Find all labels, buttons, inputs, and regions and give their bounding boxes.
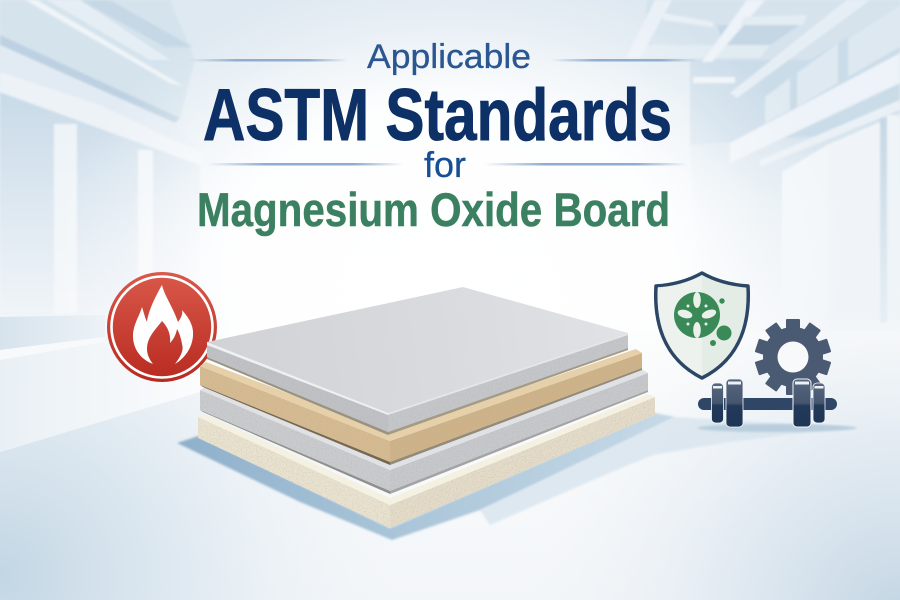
title block <box>189 38 698 236</box>
icon: fire resistance badge <box>107 272 217 382</box>
icon: dumbbell <box>697 379 857 432</box>
heading line: ASTM Standards: ASTM Standards <box>203 75 672 156</box>
board 3: grey <box>200 369 648 494</box>
floor <box>0 330 900 600</box>
heading line: Applicable: Applicable <box>367 38 531 76</box>
icon: gear <box>755 319 831 395</box>
board 2: tan <box>200 349 642 465</box>
stacked magnesium oxide boards <box>198 287 655 528</box>
icon: mold resistance shield <box>656 273 748 378</box>
flame <box>133 285 193 364</box>
board 1: top grey <box>207 287 628 435</box>
heading line: for: for <box>424 144 466 185</box>
heading line: Magnesium Oxide Board: Magnesium Oxide Board <box>197 183 670 236</box>
board 4: cream <box>198 394 655 528</box>
mold spore circle <box>674 292 720 338</box>
floor shadow under boards <box>177 413 850 540</box>
